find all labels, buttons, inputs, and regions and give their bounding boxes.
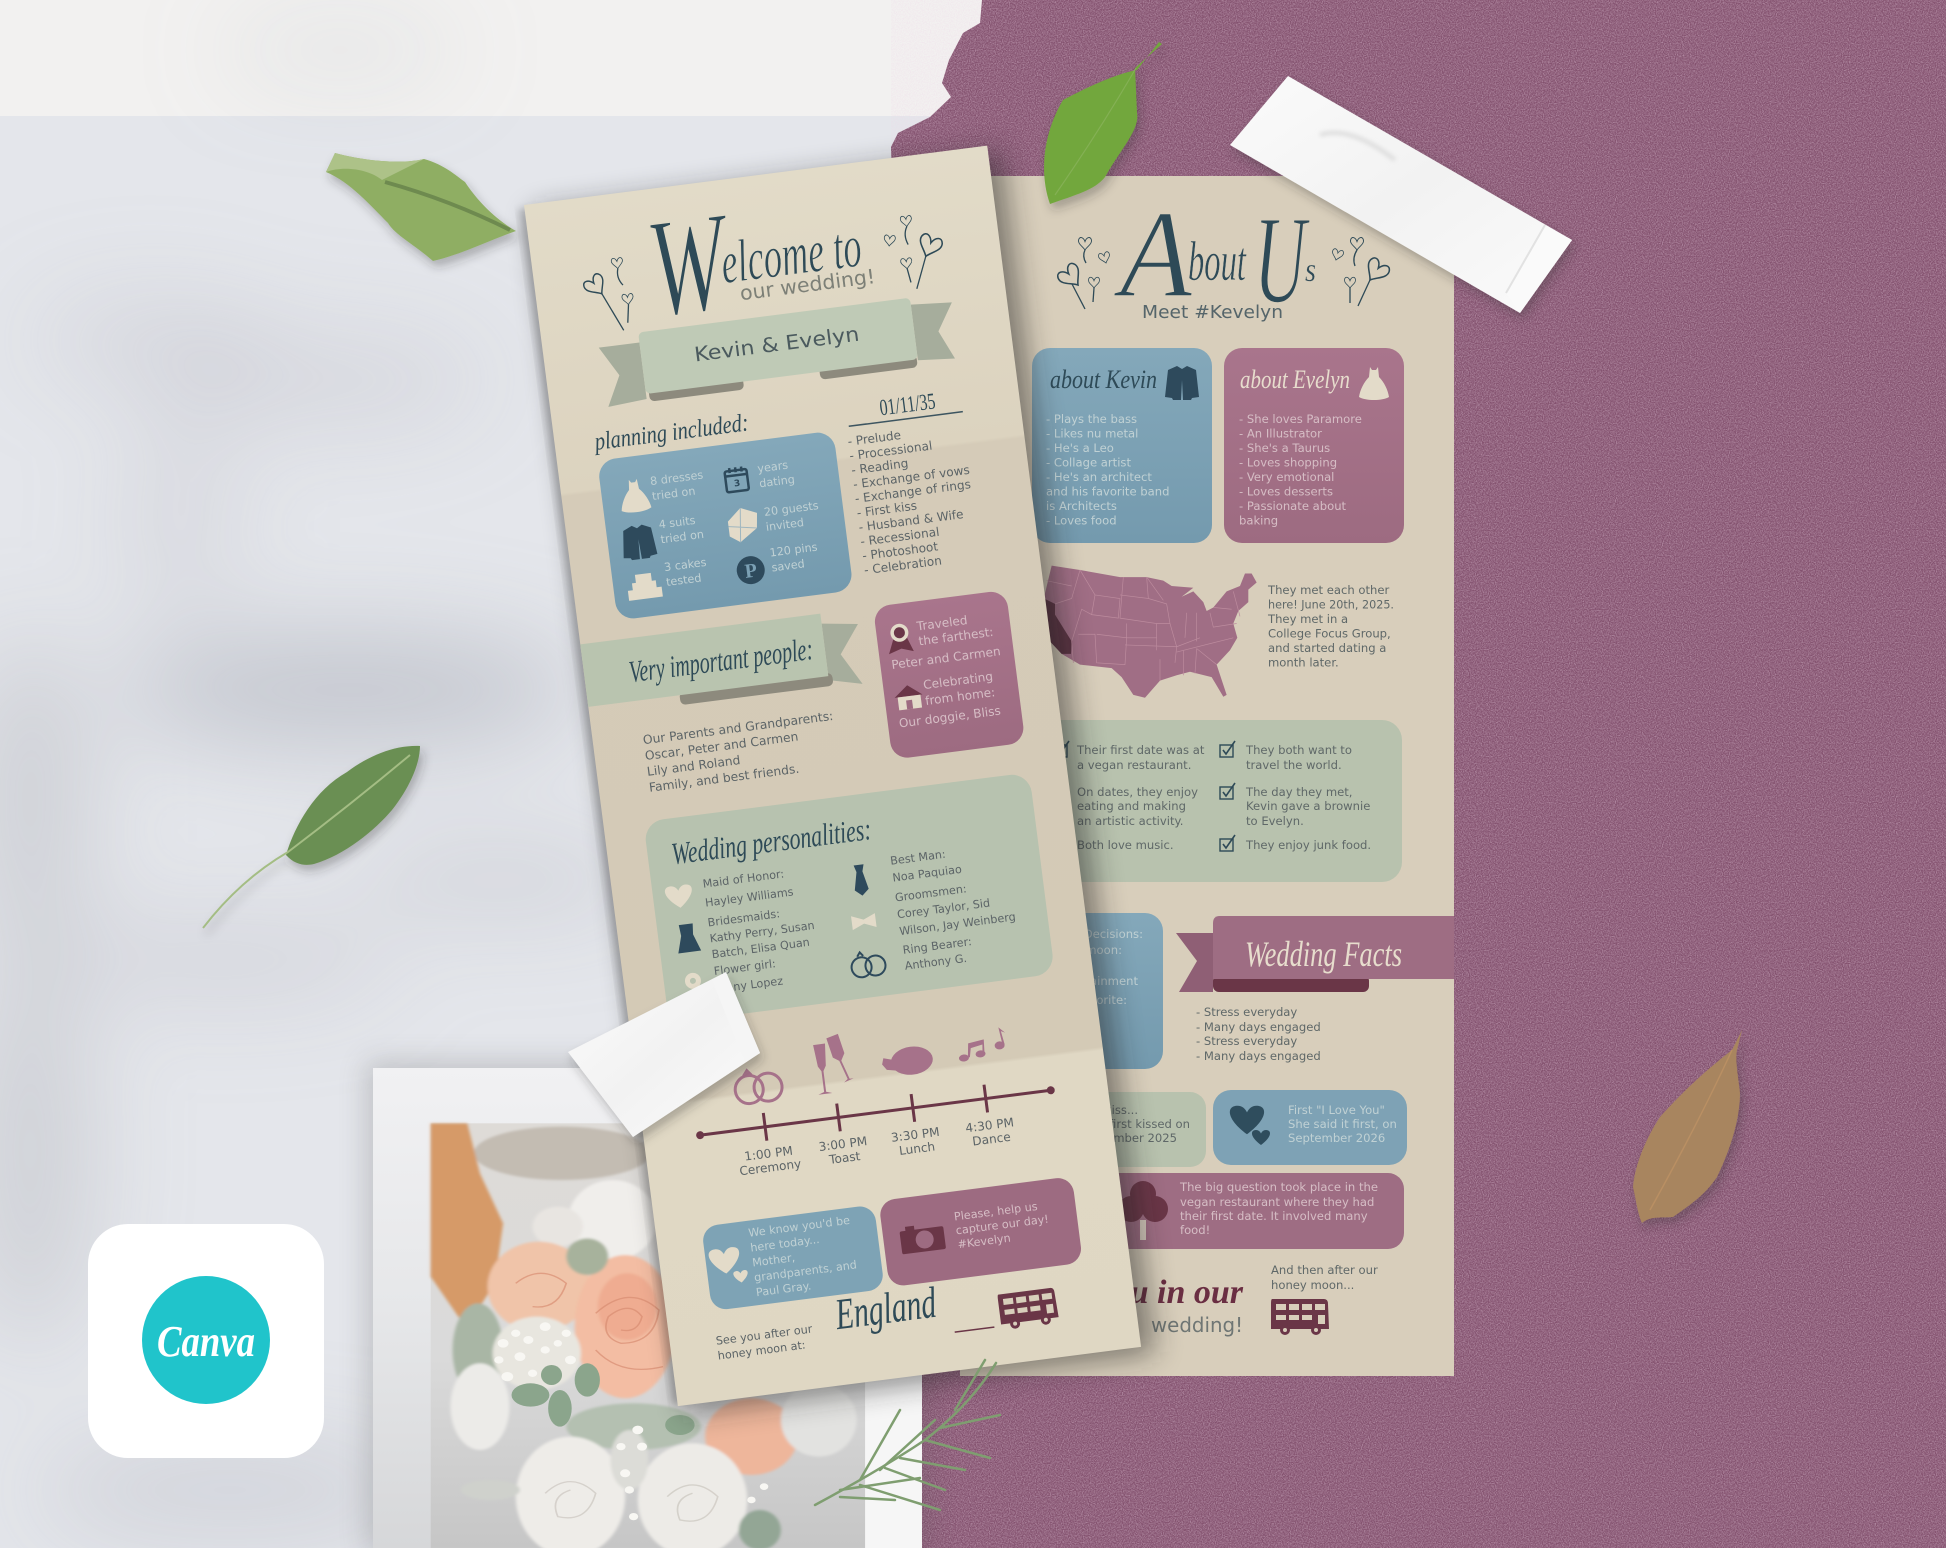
list: ceremony order: - Exchange of rings — [854, 477, 972, 506]
panel: about Kevin: - Likes nu metal — [1046, 426, 1138, 440]
panel: wedding personalities: Kathy Perry, Susan — [709, 919, 815, 945]
icon: bow tie — [851, 913, 877, 930]
text: see you after: See you after our — [715, 1322, 813, 1348]
icon: house — [893, 683, 924, 711]
ribbon: Wedding Facts: Wedding Facts — [1245, 934, 1402, 974]
text: thank you — [996, 1274, 1244, 1337]
tape: middle — [568, 972, 760, 1137]
line to bus — [955, 1326, 994, 1333]
list: wedding facts: - Stress everyday — [1196, 1034, 1297, 1048]
panel: about Kevin: - Collage artist — [1046, 456, 1131, 470]
icon: envelope — [726, 506, 760, 543]
panel: first kiss: September 2025 — [1080, 1131, 1177, 1145]
title: Welcome to: elcome to — [717, 213, 865, 296]
title: About Us: U — [1254, 192, 1310, 330]
panel: decisions: Big Decisions: — [1061, 927, 1143, 941]
panel: checklist facts — [1020, 720, 1402, 882]
panel: about Evelyn: - She's a Taurus — [1239, 441, 1330, 455]
leaf: bright green top — [1044, 42, 1162, 204]
panel: farthest and from home — [873, 590, 1025, 760]
icon: turkey — [880, 1044, 934, 1078]
text: see you after — [715, 1322, 815, 1363]
panel: about Kevin: - Loves food — [1046, 514, 1117, 528]
panel: the proposal: food! — [1180, 1223, 1210, 1237]
right card: About Us — [960, 176, 1454, 1376]
panel: farthest and from home: Traveled — [915, 613, 968, 634]
panel: remembered loved ones: here today... — [750, 1233, 820, 1255]
panel: first kiss — [1020, 1092, 1206, 1167]
list: ceremony order: - Recessional — [860, 525, 940, 549]
icon: hearts — [1230, 1106, 1270, 1145]
panel: decisions: Entertainment — [1054, 974, 1138, 988]
date: 01/11/35 — [878, 388, 937, 420]
text: how they met: They met each other — [1267, 583, 1390, 597]
panel: checklist facts: to Evelyn. — [1246, 814, 1304, 828]
panel: planning stats: 8 dresses — [649, 468, 704, 488]
panel: wedding personalities: Best Man: — [890, 848, 946, 868]
panel: about Kevin: and his favorite band — [1046, 484, 1169, 498]
text: important people: Our Parents and Grandparents: — [642, 709, 834, 747]
chart: timeline — [694, 1076, 1061, 1183]
panel: hashtag call to action: #Kevelyn — [957, 1232, 1011, 1251]
panel: planning stats: 120 pins — [769, 541, 818, 560]
list: wedding facts: - Many days engaged — [1196, 1049, 1321, 1063]
panel: the proposal: The big question took place in the — [1179, 1180, 1378, 1194]
panel: about Evelyn: about Evelyn — [1240, 365, 1350, 394]
icon: rings — [850, 949, 887, 978]
panel: wedding personalities: Maid of Honor: — [702, 867, 785, 891]
panel: checklist facts: travel the world. — [1246, 758, 1342, 772]
list: ceremony order: - First kiss — [856, 499, 918, 520]
title: About Us — [1113, 186, 1316, 330]
icon: bus — [997, 1287, 1059, 1330]
doodle hearts right — [880, 211, 949, 292]
text: important people: Family, and best friends. — [648, 762, 800, 795]
icon: tree — [1118, 1181, 1168, 1240]
panel: about Evelyn: - Loves shopping — [1239, 456, 1337, 470]
icon: rings pink — [733, 1067, 784, 1105]
list: ceremony order: - Photoshoot — [861, 539, 939, 563]
icon: heart — [664, 884, 694, 910]
chart: timeline: Dance — [972, 1130, 1011, 1149]
panel: first kiss: First kiss... — [1077, 1103, 1138, 1117]
list: ceremony order: - Husband & Wife — [858, 507, 964, 534]
panel: farthest and from home: from home: — [924, 685, 996, 708]
panel: wedding personalities: Wedding personalities: — [669, 811, 873, 871]
chart: timeline: Toast — [827, 1149, 861, 1167]
panel: wedding personalities: Flower girl: — [713, 957, 777, 978]
panel: planning stats: dating — [759, 473, 796, 490]
panel: remembered loved ones: We know you'd be — [748, 1214, 851, 1240]
panel: remembered loved ones — [701, 1205, 885, 1311]
title: About Us: A — [1113, 186, 1193, 324]
title: Welcome to — [639, 166, 870, 347]
panel: checklist facts: an artistic activity. — [1077, 814, 1183, 828]
text: how they met: and started dating a — [1268, 641, 1386, 655]
list: ceremony order: - Celebration — [863, 553, 943, 577]
panel: checklist facts: eating and making — [1077, 799, 1186, 813]
panel: checklist facts: They enjoy junk food. — [1245, 838, 1371, 852]
icon: flower — [684, 972, 702, 990]
panel: planning stats: 3 cakes — [663, 556, 707, 574]
text: how they met: College Focus Group, — [1268, 626, 1391, 640]
panel: checklist facts: Their first date was at — [1076, 743, 1205, 757]
text: thank you: Thank you in our — [996, 1274, 1244, 1311]
icon: dress — [618, 478, 652, 514]
panel: first I love you: She said it first, on — [1288, 1117, 1397, 1131]
panel: the proposal: vegan restaurant where they had — [1180, 1195, 1374, 1209]
panel: about Evelyn: baking — [1239, 514, 1278, 528]
panel: about Kevin: about Kevin — [1050, 365, 1157, 394]
icon: hearts — [708, 1246, 749, 1286]
icon: tie — [852, 864, 869, 896]
panel: first I love you: September 2026 — [1288, 1131, 1385, 1145]
list: ceremony order: - Reading — [850, 456, 909, 477]
icon: calendar — [724, 466, 749, 493]
icon: pinterest: P — [743, 559, 758, 583]
panel: planning stats: tried on — [660, 528, 705, 546]
text: after honeymoon with bus — [1271, 1263, 1378, 1335]
logo: Canva app icon — [88, 1224, 324, 1458]
panel: wedding personalities: Batch, Elisa Quan — [711, 936, 810, 961]
panel: the proposal: their first date. It involved many — [1180, 1209, 1368, 1223]
chart: US map with California highlighted — [1043, 566, 1257, 698]
icon: suit — [1165, 366, 1199, 400]
panel: planning stats: years — [757, 459, 789, 475]
text: after honeymoon with bus: And then after our — [1271, 1263, 1378, 1277]
text: important people: Oscar, Peter and Carmen — [644, 730, 799, 763]
panel: about Evelyn: - Passionate about — [1239, 499, 1347, 513]
panel: remembered loved ones: Paul Gray. — [755, 1279, 812, 1299]
title: About Us: bout — [1188, 231, 1247, 293]
panel: farthest and from home: Celebrating — [922, 669, 994, 692]
leaf: top left — [326, 153, 516, 261]
text: how they met: month later. — [1268, 656, 1339, 670]
panel: farthest and from home: the farthest: — [918, 625, 994, 648]
panel: wedding personalities: Hayley Williams — [704, 885, 794, 910]
doodle hearts right — [1331, 238, 1391, 306]
panel: planning stats: tried on — [651, 485, 696, 503]
text: see you after: honey moon at: — [717, 1339, 806, 1363]
panel: wedding personalities: Noa Paquiao — [892, 863, 963, 885]
subtitle: Meet #Kevelyn — [1142, 302, 1283, 323]
ribbon: Very important people — [580, 609, 866, 719]
panel: hashtag call to action: Please, help us — [953, 1200, 1038, 1224]
chart: timeline: 1:00 PM — [743, 1144, 794, 1164]
panel: checklist facts: Kevin gave a brownie — [1246, 799, 1370, 813]
panel: farthest and from home: Our doggie, Bliss — [898, 704, 1002, 731]
title: Welcome to: W — [639, 183, 742, 347]
panel: wedding personalities: Anthony G. — [904, 952, 968, 973]
panel: wedding personalities: Corey Taylor, Sid — [896, 897, 991, 921]
chart: timeline icons — [730, 1013, 1010, 1105]
date — [845, 385, 963, 427]
tape: top right — [1230, 76, 1572, 313]
leaf: brown — [1633, 1030, 1742, 1223]
text: how they met — [1267, 583, 1394, 670]
panel: farthest and from home: Peter and Carmen — [891, 644, 1001, 672]
panel: wedding personalities — [643, 772, 1055, 1023]
icon: dress — [1359, 367, 1389, 400]
sprig: rosemary — [815, 1360, 1000, 1510]
icon: medal — [885, 622, 914, 654]
ribbon: Very important people: Very important people: — [627, 631, 815, 689]
icon: champagne — [811, 1033, 855, 1095]
panel: wedding personalities: Ring Bearer: — [902, 935, 973, 957]
panel: about Evelyn: - She loves Paramore — [1239, 412, 1362, 426]
list: ceremony order — [847, 420, 982, 577]
panel: about Kevin: is Architects — [1046, 499, 1117, 513]
heading: planning included: planning included: — [591, 409, 750, 456]
panel: about Evelyn: - An Illustrator — [1239, 426, 1322, 440]
panel: first I love you: First "I Love You" — [1288, 1103, 1385, 1117]
panel: about Evelyn: - Loves desserts — [1239, 484, 1333, 498]
panel: wedding personalities: Bridesmaids: — [707, 907, 781, 929]
panel: planning stats: invited — [765, 516, 805, 534]
icon: music notes — [956, 1027, 1008, 1062]
panel: wedding personalities: Jenny Lopez — [714, 974, 784, 996]
panel: decisions — [1020, 913, 1163, 1069]
panel: about Evelyn — [1224, 348, 1404, 543]
panel: about Kevin: - He's a Leo — [1046, 441, 1114, 455]
photo frame with bouquet — [367, 1062, 927, 1548]
panel: about Kevin: - Plays the bass — [1046, 412, 1137, 426]
panel: first kiss: They first kissed on — [1076, 1117, 1190, 1131]
panel: about Evelyn: - Very emotional — [1239, 470, 1334, 484]
panel: planning stats: 20 guests — [763, 499, 819, 519]
ribbon: Kevin and Evelyn — [597, 293, 959, 407]
doodle hearts left — [579, 257, 637, 335]
panel: hashtag call to action: capture our day! — [955, 1213, 1049, 1237]
panel: planning stats — [597, 431, 854, 620]
text: important people — [642, 709, 840, 795]
chart: timeline: 4:30 PM — [965, 1115, 1015, 1135]
leaf: sage — [203, 746, 420, 928]
icon: bridesmaid dress — [675, 923, 701, 953]
panel: decisions: Honeymoon: — [1048, 943, 1122, 957]
panel: first I love you — [1213, 1090, 1407, 1165]
panel: remembered loved ones: grandparents, and — [753, 1258, 858, 1284]
list: wedding facts — [1196, 1005, 1321, 1063]
subtitle: our wedding! — [738, 264, 876, 305]
panel: checklist facts: On dates, they enjoy — [1077, 785, 1198, 799]
icon: cake — [626, 572, 663, 601]
photo: bride bouquet — [431, 1123, 865, 1548]
panel: planning stats: saved — [771, 557, 805, 574]
left card: Welcome — [518, 144, 1155, 1415]
chart: timeline: Ceremony — [739, 1157, 802, 1178]
panel: about Kevin — [1032, 348, 1212, 543]
text: thank you: wedding! — [1151, 1313, 1243, 1337]
panel: checklist facts: They both want to — [1245, 743, 1352, 757]
panel: planning stats: 4 suits — [658, 514, 696, 531]
icon: suit — [620, 523, 658, 561]
chart: timeline: 3:00 PM — [818, 1134, 868, 1154]
icon: pinterest — [735, 554, 766, 586]
text: after honeymoon with bus: honey moon... — [1271, 1278, 1354, 1292]
background: textured purple paper with torn edge — [891, 0, 1946, 1548]
list: ceremony order: - Processional — [849, 439, 933, 463]
list: ceremony order: - Exchange of vows — [852, 463, 971, 492]
panel: wedding personalities: Groomsmen: — [894, 882, 967, 904]
list: wedding facts: - Stress everyday — [1196, 1005, 1297, 1019]
list: ceremony order: - Prelude — [847, 428, 902, 449]
panel: decisions: Favorite: — [1077, 993, 1127, 1007]
panel: remembered loved ones: Mother, — [751, 1251, 796, 1270]
ribbon: Wedding Facts — [1176, 916, 1454, 992]
panel: checklist facts: The day they met, — [1245, 785, 1352, 799]
panel: wedding personalities: Wilson, Jay Weinberg — [899, 910, 1016, 938]
chart: timeline: Lunch — [898, 1139, 936, 1158]
panel: planning stats: 3 — [733, 479, 741, 490]
text: England: England — [832, 1278, 940, 1339]
text: important people: Lily and Roland — [646, 753, 741, 779]
panel: the proposal — [1080, 1173, 1404, 1249]
panel: planning stats: tested — [665, 572, 702, 589]
panel: checklist facts: a vegan restaurant. — [1077, 758, 1191, 772]
doodle hearts left — [1056, 238, 1111, 309]
icon: camera — [899, 1222, 946, 1254]
title: About Us: s — [1305, 252, 1316, 289]
list: wedding facts: - Many days engaged — [1196, 1020, 1321, 1034]
panel: about Kevin: - He's an architect — [1046, 470, 1152, 484]
panel: checklist facts: Both love music. — [1077, 838, 1174, 852]
logo: Canva app icon: Canva — [157, 1317, 255, 1366]
text: how they met: They met in a — [1267, 612, 1348, 626]
ribbon: Kevin and Evelyn: Kevin & Evelyn — [693, 322, 861, 366]
chart: timeline: 3:30 PM — [890, 1125, 940, 1145]
text: how they met: here! June 20th, 2025. — [1268, 598, 1394, 612]
panel: hashtag call to action — [878, 1176, 1083, 1287]
